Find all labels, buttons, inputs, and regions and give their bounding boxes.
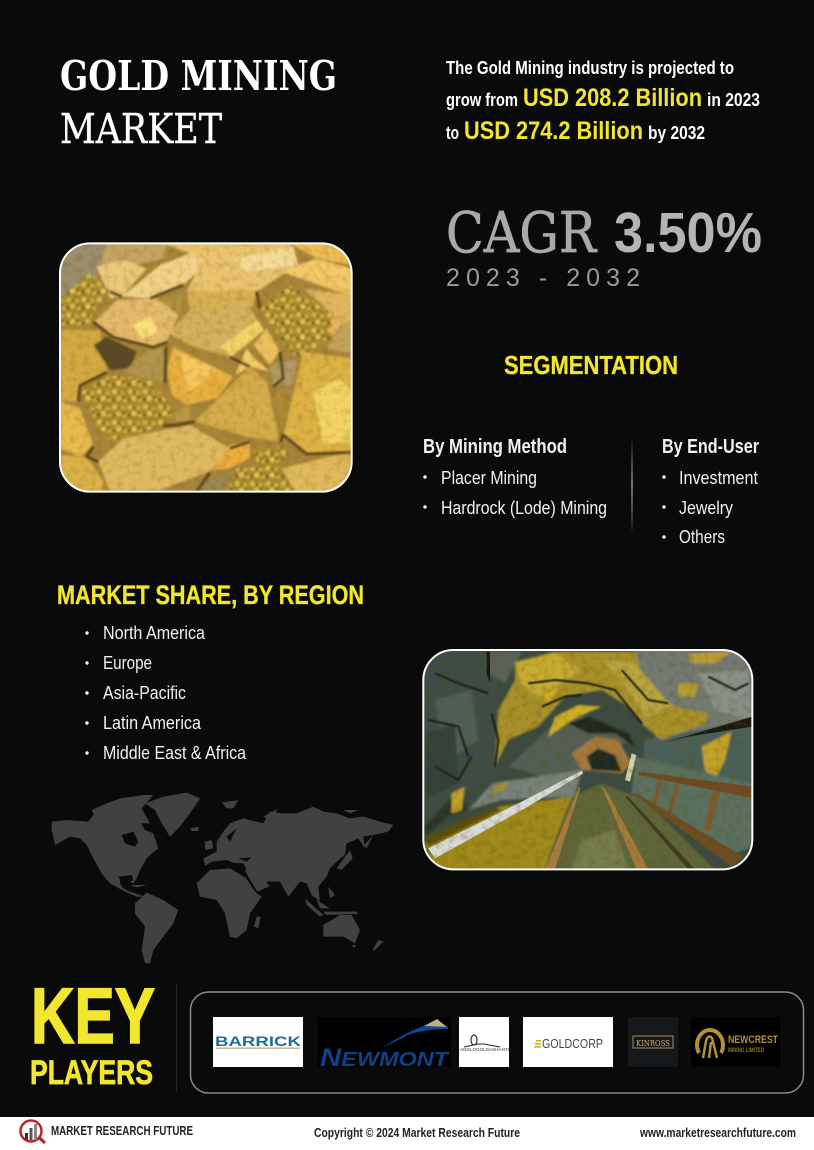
map inland water cutouts [118, 828, 257, 892]
logo: Barrick [213, 1017, 303, 1067]
photo: mine tunnel [423, 650, 752, 869]
logo: Newcrest: MINING LIMITED [728, 1048, 764, 1054]
key players heading: KEY [31, 971, 155, 1060]
market projection text: to [446, 123, 459, 143]
market projection text: in 2023 [707, 90, 760, 110]
key players heading: PLAYERS [30, 1054, 153, 1092]
logo: Newcrest [691, 1017, 780, 1067]
region list: North America [103, 623, 206, 643]
CAGR: 3.50% [614, 201, 762, 265]
title: MARKET [60, 105, 222, 153]
CAGR: 2023 - 2032 [446, 264, 640, 292]
CAGR [446, 201, 762, 292]
region list: Middle East & Africa [103, 743, 247, 763]
logo: Newmont: NEWMONT [320, 1044, 450, 1072]
logo: Newmont [318, 1017, 451, 1072]
segmentation: by end-user [662, 436, 759, 547]
photo: gold nuggets [60, 243, 352, 492]
logo: Kinross: KINROSS [636, 1039, 670, 1049]
logo: Barrick: BARRICK [215, 1033, 301, 1049]
market projection text: The Gold Mining industry is projected to [446, 58, 734, 78]
key players panel [190, 992, 804, 1093]
segmentation: by mining method: Placer Mining [441, 468, 537, 488]
key players heading [30, 971, 155, 1092]
icon: Market Research Future logo [20, 1120, 46, 1144]
market projection text: by 2032 [648, 123, 705, 143]
logo: AngloGold Ashanti: ANGLOGOLDASHANTI [460, 1047, 509, 1052]
logo: Newcrest: NEWCREST [728, 1034, 778, 1046]
world map [52, 793, 393, 963]
market share heading: MARKET SHARE, BY REGION [57, 580, 364, 610]
region list: Latin America [103, 713, 202, 733]
region list: Asia-Pacific [103, 683, 186, 703]
logo: AngloGold Ashanti [459, 1017, 509, 1067]
segmentation: by end-user: Jewelry [679, 498, 733, 518]
segmentation: by mining method: Hardrock (Lode) Mining [441, 498, 607, 518]
footer [0, 1117, 814, 1150]
segmentation heading: SEGMENTATION [504, 350, 678, 380]
region list: Europe [103, 653, 152, 673]
market projection text: grow from [446, 90, 518, 110]
title: GOLD MINING [60, 52, 337, 100]
market projection text [446, 58, 760, 145]
logo: Kinross [628, 1017, 678, 1067]
segmentation: by end-user: Investment [679, 468, 758, 488]
CAGR: CAGR [446, 201, 598, 266]
market projection text: USD 208.2 Billion [523, 84, 702, 112]
market projection text: USD 274.2 Billion [464, 117, 643, 145]
segmentation: by mining method: By Mining Method [423, 436, 567, 458]
segmentation: by mining method [423, 436, 607, 518]
segmentation: by end-user: Others [679, 527, 725, 547]
logo: Goldcorp [523, 1017, 613, 1067]
footer: copyright: Copyright © 2024 Market Research Future [314, 1126, 520, 1140]
segmentation: by end-user: By End-User [662, 436, 759, 458]
title [60, 52, 337, 153]
footer: brand: MARKET RESEARCH FUTURE [51, 1124, 193, 1138]
logo: Goldcorp: GOLDCORP [542, 1037, 603, 1051]
region list [85, 623, 247, 763]
